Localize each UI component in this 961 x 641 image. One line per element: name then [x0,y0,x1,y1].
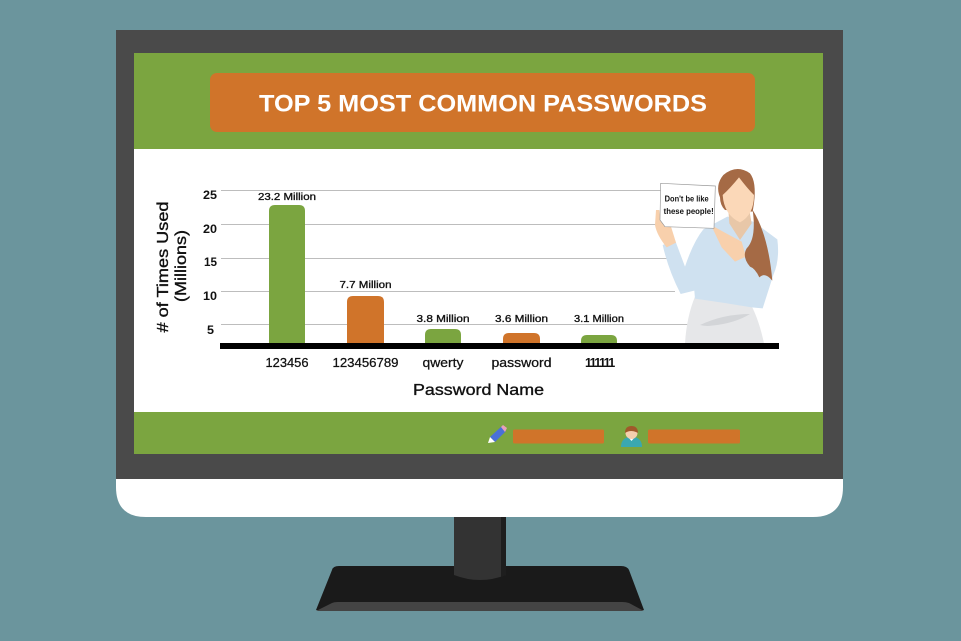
footer: author icon and placeholder [488,425,604,444]
bar: password: 3.6 Million [495,313,548,325]
y axis ticks [203,190,218,337]
y axis title: (Millions) [173,230,190,302]
redacted name bar [648,430,740,444]
title banner [210,73,755,132]
skirt [685,297,764,343]
y axis title: # of Times Used [155,202,172,332]
gridlines [221,190,690,324]
footer: reviewer icon and placeholder [621,426,740,447]
title banner: TOP 5 MOST COMMON PASSWORDS [259,90,707,118]
illustration: woman holding sign [655,169,778,343]
face [723,177,754,222]
x axis title: Password Name [413,382,544,399]
bar: 123456789 [332,279,399,370]
sign [660,183,715,228]
blouse [663,217,778,308]
bar: 111111 [574,313,624,370]
bar: qwerty: qwerty [422,356,464,370]
y axis ticks: 10 [203,291,217,303]
y axis ticks: 20 [203,224,217,236]
screen header band [134,53,823,149]
y axis title [155,202,190,332]
icon: pencil [488,425,507,443]
y axis ticks: 15 [204,257,218,269]
sign: Don't be like [665,194,709,204]
bar: qwerty: 3.8 Million [416,313,470,325]
bar: qwerty [416,313,470,370]
y axis ticks: 5 [207,325,215,337]
redacted name bar [513,430,604,444]
bar chart [155,190,690,399]
icon: person [621,426,642,447]
bar: 123456: 123456 [266,356,309,370]
pointing hand [711,225,746,262]
bar: 111111: 3.1 Million [574,313,624,325]
ponytail [745,210,772,281]
sign: these people! [664,206,714,216]
screen footer band [134,412,823,454]
bar: password [492,313,552,370]
bar: 123456789: 7.7 Million [340,279,392,291]
bar: 123456 [258,191,316,370]
bar: password: password [492,356,552,370]
monitor chin [116,470,843,517]
monitor stand [316,517,644,611]
monitor frame [116,30,843,479]
neck and chest [728,210,752,240]
y axis ticks: 25 [203,190,218,202]
chart baseline [220,343,779,349]
bar: 123456: 23.2 Million [258,191,316,203]
bar: 111111: 111111 [585,356,615,370]
screen body [134,149,823,412]
bar: 123456789: 123456789 [332,356,399,370]
hair back [718,169,755,212]
raised hand [655,210,676,247]
